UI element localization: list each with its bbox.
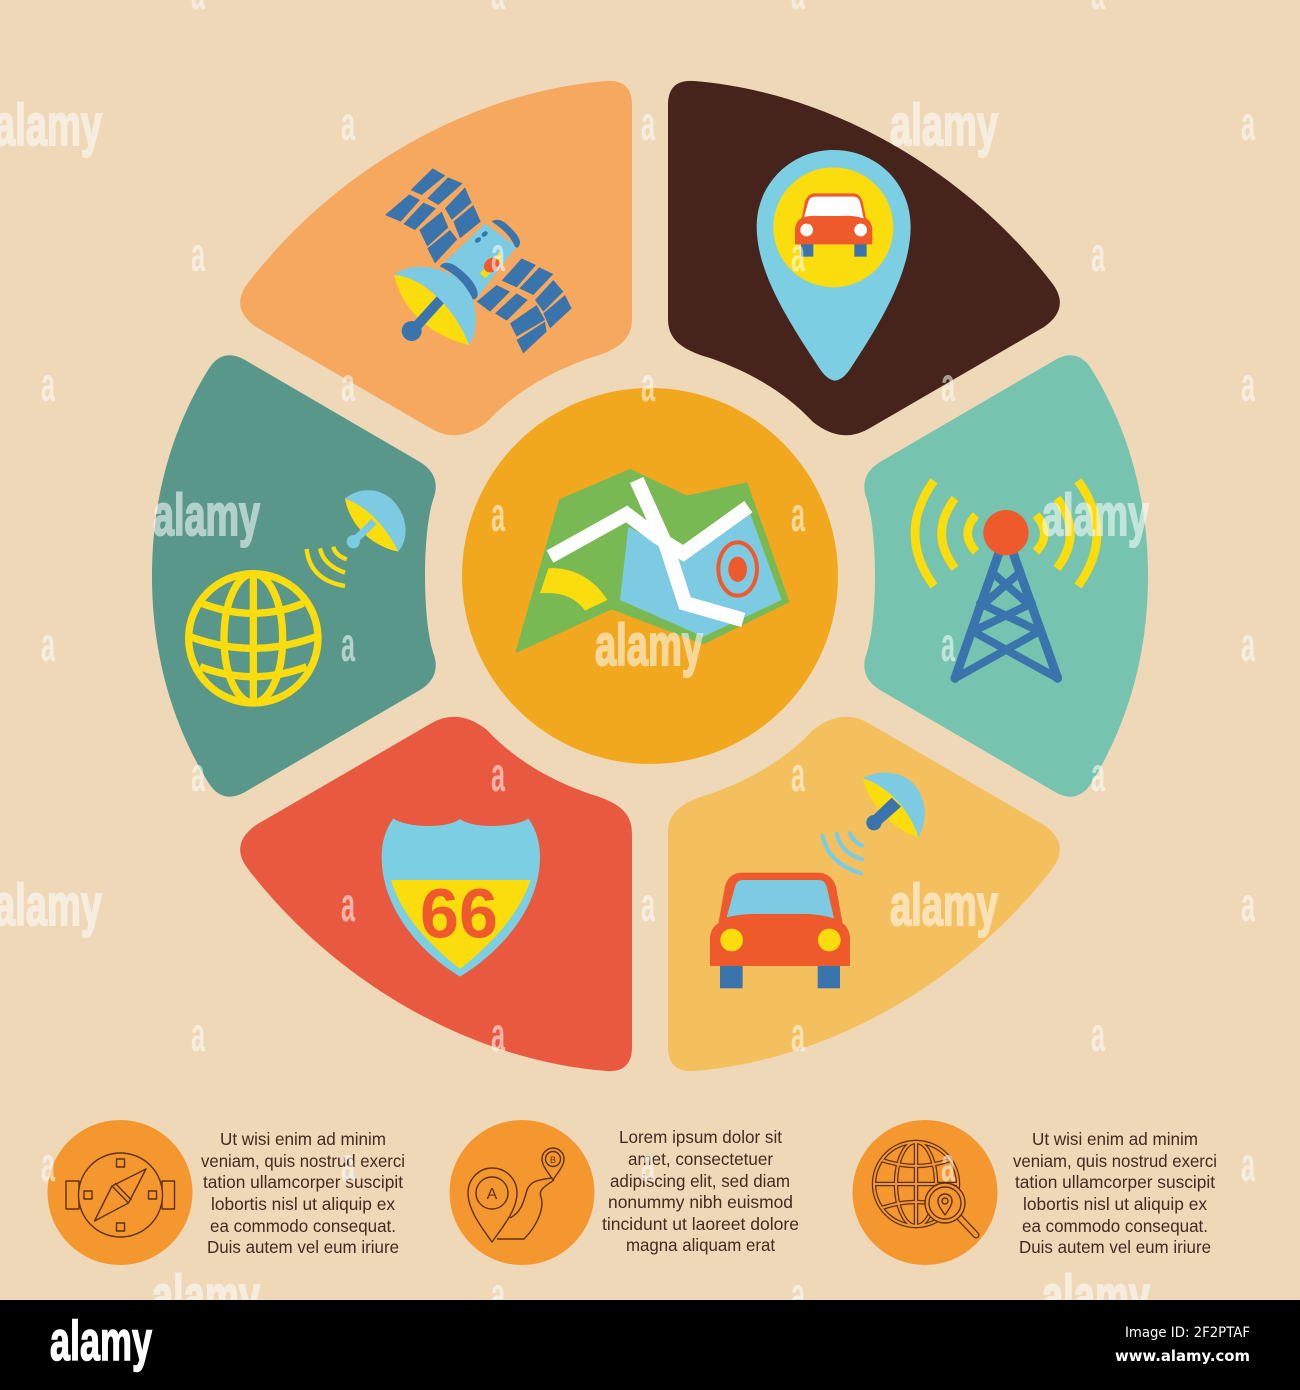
text block 3: lobortis nisl ut aliquip ex bbox=[1023, 1194, 1207, 1214]
icon: route 66 shield: 66 bbox=[420, 875, 498, 953]
small watermark marks: a bbox=[791, 489, 805, 542]
small watermark marks: a bbox=[491, 1009, 505, 1062]
text block 1 bbox=[201, 1129, 405, 1257]
small watermark marks: a bbox=[341, 1139, 355, 1192]
small watermark marks: a bbox=[491, 229, 505, 282]
panel: route 66 bbox=[240, 717, 632, 1071]
small watermark marks: a bbox=[641, 1139, 655, 1192]
watermarks: alamy bbox=[890, 93, 998, 158]
watermarks: alamy bbox=[595, 613, 703, 678]
icon: route pins bbox=[468, 1148, 564, 1242]
small watermark marks: a bbox=[1091, 229, 1105, 282]
image id: Image ID: 2F2PTAF bbox=[1125, 1325, 1250, 1341]
small watermark marks: a bbox=[191, 749, 205, 802]
watermarks: alamy bbox=[1042, 1264, 1150, 1329]
footer bar bbox=[0, 1300, 1300, 1390]
icon: car location pin bbox=[757, 150, 911, 381]
bullet 1: compass bbox=[48, 1120, 192, 1265]
small watermark marks: a bbox=[791, 1009, 805, 1062]
small watermark marks: a bbox=[491, 489, 505, 542]
small watermark marks: a bbox=[41, 1139, 55, 1192]
panel: location pin bbox=[668, 81, 1060, 435]
text block 3: ea commodo consequat. bbox=[1022, 1216, 1208, 1236]
bullet 3: globe search bbox=[852, 1120, 998, 1265]
icon: satellite bbox=[385, 168, 572, 353]
text block 3: tation ullamcorper suscipit bbox=[1015, 1172, 1215, 1192]
watermarks: alamy bbox=[153, 483, 260, 548]
panel: satellite bbox=[240, 81, 632, 435]
small watermark marks: a bbox=[341, 619, 355, 672]
text block 1: Ut wisi enim ad minim bbox=[220, 1129, 386, 1149]
text block 2: nonummy nibh euismod bbox=[608, 1192, 793, 1212]
text block 3 bbox=[1013, 1129, 1217, 1257]
small watermark marks: a bbox=[341, 879, 355, 932]
text block 2 bbox=[602, 1127, 799, 1255]
text block 2: adipiscing elit, sed diam bbox=[610, 1171, 790, 1191]
small watermark marks: a bbox=[41, 359, 55, 412]
small watermark marks: a bbox=[1241, 98, 1255, 151]
footer logo: alamy bbox=[50, 1309, 152, 1372]
text block 1: tation ullamcorper suscipit bbox=[203, 1172, 403, 1192]
text block 1: ea commodo consequat. bbox=[210, 1216, 396, 1236]
small watermark marks: a bbox=[791, 749, 805, 802]
small watermark marks: a bbox=[641, 359, 655, 412]
small watermark marks: a bbox=[191, 1009, 205, 1062]
small watermark marks: a bbox=[491, 1269, 505, 1322]
small watermark marks: a bbox=[41, 619, 55, 672]
panel: radio tower bbox=[864, 355, 1148, 797]
icon: radio tower bbox=[915, 481, 1097, 678]
small watermark marks: a bbox=[941, 619, 955, 672]
small watermark marks: a bbox=[1241, 1139, 1255, 1192]
watermarks: alamy bbox=[152, 1264, 260, 1329]
bullet 2: route from A to B bbox=[450, 1120, 594, 1265]
small watermark marks: a bbox=[1241, 879, 1255, 932]
icon: globe with magnifier bbox=[874, 1142, 976, 1235]
icon: folded map bbox=[517, 470, 788, 652]
small watermark marks: a bbox=[791, 1269, 805, 1322]
site url: www.alamy.com bbox=[1115, 1347, 1250, 1365]
text block 2: amet, consectetuer bbox=[628, 1149, 773, 1169]
label: B: B bbox=[550, 1155, 556, 1165]
small watermark marks: a bbox=[191, 229, 205, 282]
text block 3: veniam, quis nostrud exerci bbox=[1013, 1151, 1217, 1171]
watermarks: alamy bbox=[890, 873, 998, 938]
small watermark marks: a bbox=[1091, 749, 1105, 802]
small watermark marks: a bbox=[641, 879, 655, 932]
text block 1: Duis autem vel eum iriure bbox=[207, 1237, 399, 1257]
text block 1: veniam, quis nostrud exerci bbox=[201, 1151, 405, 1171]
panel: car and dish bbox=[668, 717, 1060, 1071]
icon: route 66 shield bbox=[382, 818, 540, 977]
icon: compass bbox=[66, 1153, 174, 1237]
small watermark marks: a bbox=[641, 98, 655, 151]
small watermark marks: a bbox=[1241, 359, 1255, 412]
label: A: A bbox=[487, 1186, 498, 1203]
text block 2: Lorem ipsum dolor sit bbox=[619, 1127, 782, 1147]
icon: car with dish bbox=[710, 773, 925, 988]
small watermark marks: a bbox=[341, 98, 355, 151]
text block 1: lobortis nisl ut aliquip ex bbox=[211, 1194, 395, 1214]
small watermark marks: a bbox=[941, 359, 955, 412]
small watermark marks: a bbox=[1241, 619, 1255, 672]
text block 2: magna aliquam erat bbox=[626, 1235, 775, 1255]
watermarks bbox=[0, 93, 1150, 1329]
small watermark marks: a bbox=[791, 229, 805, 282]
text block 2: tincidunt ut laoreet dolore bbox=[602, 1214, 799, 1234]
small watermark marks: a bbox=[341, 359, 355, 412]
panel: globe and dish bbox=[152, 355, 436, 797]
text block 3: Duis autem vel eum iriure bbox=[1019, 1237, 1211, 1257]
small watermark marks: a bbox=[1091, 1009, 1105, 1062]
text block 3: Ut wisi enim ad minim bbox=[1032, 1129, 1198, 1149]
icon: globe with dish bbox=[189, 490, 406, 703]
panel: centre circle with map bbox=[462, 388, 838, 764]
watermarks: alamy bbox=[1042, 483, 1149, 548]
small watermark marks: a bbox=[941, 1139, 955, 1192]
small watermark marks: a bbox=[491, 749, 505, 802]
